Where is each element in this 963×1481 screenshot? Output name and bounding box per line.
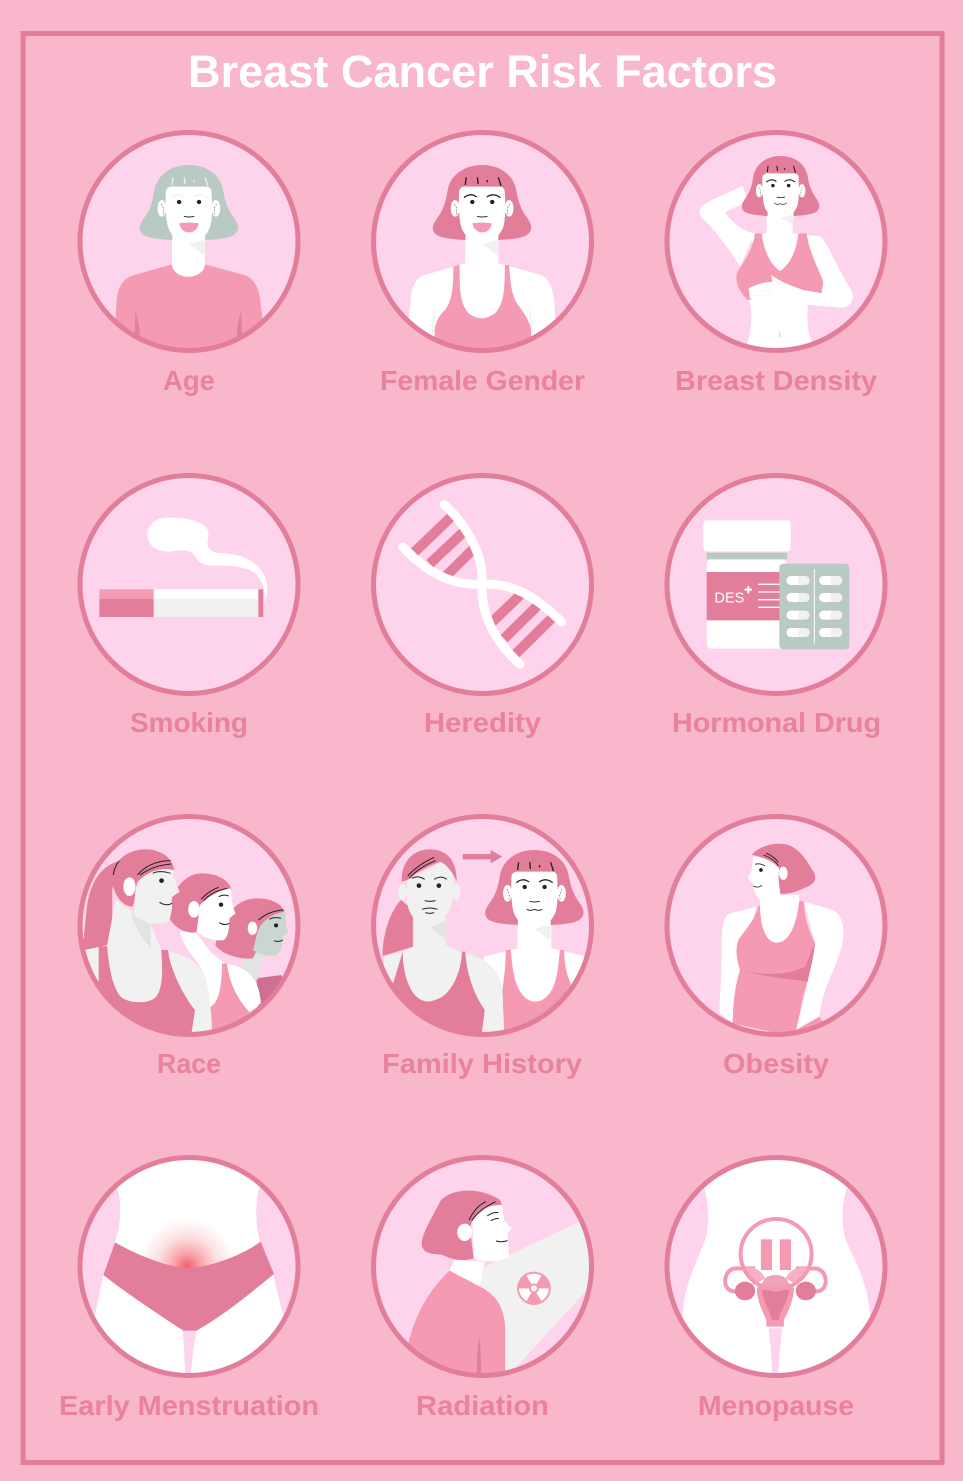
title: Breast Cancer Risk Factors — [188, 46, 777, 97]
circle background: race — [80, 816, 298, 1034]
label: Early Menstruation: Early Menstruation — [59, 1390, 319, 1421]
icon: uterus with pause symbol — [662, 1187, 892, 1377]
circle background: hormonal drug — [667, 476, 885, 694]
circle background: early menstruation — [80, 1158, 298, 1376]
icon: mother and daughter with arrow — [382, 849, 587, 1043]
panel: female gender — [374, 132, 592, 396]
panel: early menstruation — [59, 1158, 319, 1421]
label: Radiation: Radiation — [416, 1390, 549, 1421]
icon: lower abdomen with pain glow — [82, 1187, 296, 1373]
circle background: family history — [374, 816, 592, 1034]
ring: race — [80, 816, 298, 1034]
ring: menopause — [667, 1158, 885, 1376]
icon: overweight woman — [719, 844, 844, 1037]
icon: woman in tank top — [409, 165, 555, 358]
circle background: radiation — [374, 1158, 592, 1376]
ring: obesity — [667, 816, 885, 1034]
circle background: smoking — [80, 476, 298, 694]
icon: woman under radiation beam — [406, 1191, 595, 1383]
panel: smoking — [80, 476, 298, 738]
ring: breast density — [667, 132, 885, 350]
label: Heredity: Heredity — [424, 707, 541, 738]
panel: family history — [374, 816, 592, 1079]
ring: heredity — [374, 476, 592, 694]
ring: radiation — [374, 1158, 592, 1376]
icon: DES bottle and blister pack: DES — [714, 591, 745, 607]
arrow — [463, 850, 502, 863]
circle background: menopause — [667, 1158, 885, 1376]
label: Family History: Family History — [382, 1048, 582, 1079]
circle background: obesity — [667, 816, 885, 1034]
label: Menopause: Menopause — [698, 1390, 854, 1421]
circle background: heredity — [374, 476, 592, 694]
ring: family history — [374, 816, 592, 1034]
icon: three women in profile — [83, 849, 290, 1043]
panel: radiation — [374, 1158, 595, 1421]
label: Breast Density: Breast Density — [675, 365, 877, 396]
label: Hormonal Drug: Hormonal Drug — [672, 707, 881, 738]
circle background: age — [80, 132, 298, 350]
label: Race: Race — [157, 1048, 221, 1079]
icon: woman self-examining breast — [700, 156, 853, 358]
radiation symbol — [517, 1272, 551, 1305]
panel: obesity — [667, 816, 885, 1079]
circle background: female gender — [374, 132, 592, 350]
panel: heredity — [374, 476, 592, 738]
ring: female gender — [374, 132, 592, 350]
panel: hormonal drug — [667, 476, 885, 738]
label: Age: Age — [163, 365, 215, 396]
ring: early menstruation — [80, 1158, 298, 1376]
label: Smoking: Smoking — [130, 707, 248, 738]
panel: breast density — [667, 132, 885, 396]
panel: menopause — [662, 1158, 892, 1421]
panel: age — [80, 132, 298, 396]
label: Obesity: Obesity — [723, 1048, 829, 1079]
icon: DES bottle and blister pack — [703, 520, 849, 649]
icon: older woman with grey hair — [116, 165, 263, 358]
circle background: breast density — [667, 132, 885, 350]
icon: DNA double helix — [403, 505, 561, 664]
ring: hormonal drug — [667, 476, 885, 694]
icon: cigarette with smoke — [99, 518, 267, 617]
ring: smoking — [80, 476, 298, 694]
panel: race — [80, 816, 298, 1079]
ring: age — [80, 132, 298, 350]
label: Female Gender: Female Gender — [380, 365, 585, 396]
